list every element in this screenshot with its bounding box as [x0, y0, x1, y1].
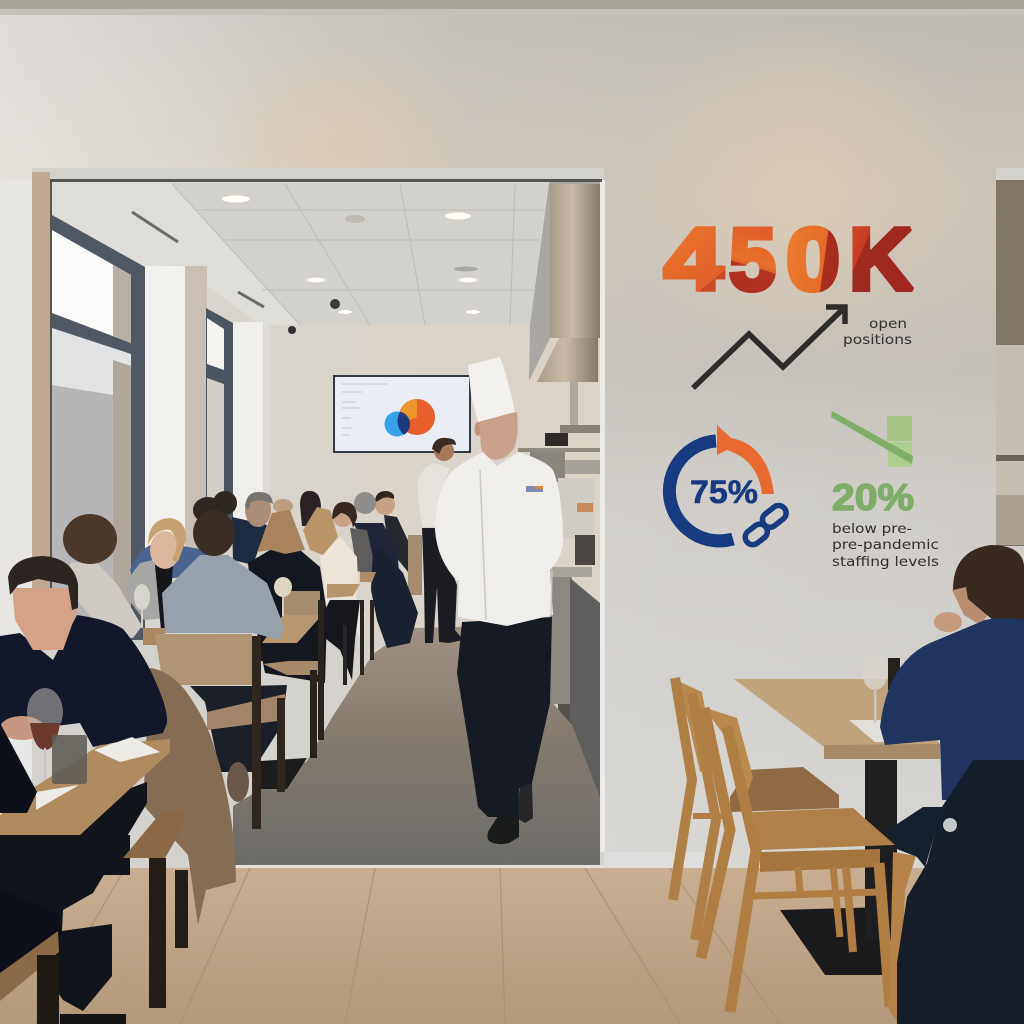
small glass on table	[134, 584, 150, 628]
grey hair guest	[353, 492, 400, 588]
digit 5: 5	[729, 210, 776, 308]
pepper mill	[888, 658, 900, 690]
20% staffing stat	[831, 411, 939, 570]
foreground diner lower	[0, 890, 62, 975]
wine glass	[27, 688, 63, 780]
chef hat	[468, 357, 515, 422]
ceiling vents and cameras	[132, 212, 478, 334]
stool seat	[123, 810, 183, 858]
staffing caption: below pre-	[832, 521, 912, 537]
open positions label: open	[869, 316, 907, 332]
left wood reveal	[32, 172, 50, 602]
wooden chair front	[701, 707, 895, 1012]
chair back front	[155, 634, 285, 829]
front chair back rest	[703, 707, 753, 800]
pillar	[145, 266, 207, 566]
table base	[780, 907, 885, 975]
digit 0: 0	[786, 210, 840, 308]
top frame shadow line	[50, 179, 602, 182]
wooden chair rear	[673, 678, 839, 940]
ceiling strip	[0, 0, 1024, 15]
brown coat on chair	[143, 668, 236, 925]
right side table	[734, 654, 940, 975]
blonde back guest	[273, 499, 293, 513]
dark under table	[0, 835, 130, 875]
hands	[0, 716, 44, 740]
grey shirt man	[162, 510, 284, 640]
chef ear	[474, 422, 482, 436]
table third	[327, 584, 360, 598]
kitchen shelves	[518, 425, 600, 565]
black trousers	[0, 782, 147, 1011]
front chair seat	[753, 808, 895, 850]
jacket logo	[943, 818, 957, 832]
75% retention ring	[669, 425, 789, 548]
trend arrow	[693, 307, 845, 388]
jacket detail	[457, 470, 552, 620]
wine glass	[274, 577, 292, 616]
ceiling grid	[172, 184, 545, 325]
rear chair seat	[730, 767, 839, 812]
open positions label: positions	[843, 332, 912, 348]
staffing caption: pre-pandemic	[832, 537, 939, 553]
door jamb right	[600, 180, 605, 852]
table far	[360, 572, 376, 582]
heads behind	[193, 491, 237, 523]
ceiling lights	[222, 196, 480, 314]
chain link icon	[742, 502, 789, 548]
table second	[143, 615, 322, 645]
letter K: K	[849, 210, 913, 308]
left wall lower light	[0, 180, 32, 650]
wine glass	[862, 654, 888, 722]
rear chair frame	[673, 678, 730, 940]
chair near woman	[261, 591, 324, 758]
wood floor	[0, 868, 1024, 1024]
baseboard	[604, 852, 704, 868]
ring blue arc	[669, 441, 733, 541]
second window	[206, 308, 233, 530]
hair	[8, 556, 78, 610]
chef face	[479, 412, 518, 460]
chair apron	[760, 849, 880, 872]
shoe	[227, 762, 249, 802]
hands	[934, 612, 962, 632]
black coat on chair	[371, 548, 418, 648]
table top	[0, 739, 170, 835]
table column	[865, 760, 897, 940]
trousers under chair	[190, 685, 287, 772]
hair and head	[953, 545, 1024, 621]
tv chart	[384, 399, 435, 436]
digit 4: 4	[664, 210, 723, 308]
tv screen	[333, 375, 471, 453]
falling bar icon	[831, 411, 913, 467]
staffing caption: staffing levels	[832, 554, 939, 570]
open positions label	[843, 316, 912, 348]
face	[12, 588, 78, 650]
table base	[260, 758, 307, 789]
ceiling tiled area	[172, 183, 548, 325]
waiter in background	[417, 438, 463, 643]
chef jacket	[435, 452, 563, 626]
seated man in navy	[880, 545, 1024, 1024]
interior back wall	[50, 180, 600, 640]
staffing caption	[832, 521, 939, 570]
table top	[734, 679, 940, 747]
rear chair back rest	[676, 680, 716, 772]
navy sweater	[880, 618, 1024, 800]
placemat	[849, 720, 885, 742]
kitchen counter	[550, 567, 600, 800]
right edge kitchen glimpse	[996, 168, 1024, 546]
far chair legs	[345, 600, 372, 685]
stool legs	[149, 858, 188, 1008]
woman navy top	[248, 510, 327, 683]
75% text: 75%	[690, 474, 758, 510]
foreground sleeve	[0, 723, 37, 813]
20% text: 20%	[832, 477, 914, 518]
left window	[52, 215, 145, 640]
infographic headline number	[664, 210, 913, 308]
interior floor	[233, 625, 600, 866]
dining room guests	[63, 491, 422, 829]
second pillar	[233, 322, 263, 542]
blonde woman	[125, 518, 186, 630]
chef	[435, 357, 563, 844]
jacket logo	[526, 486, 543, 492]
back guest woman dark	[300, 491, 321, 526]
threshold strip	[232, 865, 604, 868]
neck and face	[952, 585, 988, 625]
small wooden chair	[889, 852, 916, 1024]
cardigan woman	[332, 502, 375, 575]
water glass	[52, 735, 87, 784]
foreground chair	[0, 931, 59, 1001]
interior ceiling	[50, 180, 549, 325]
jacket on chair	[897, 760, 1024, 1024]
sweater	[0, 615, 167, 747]
tv small text lines	[342, 384, 387, 435]
foreground chair leg	[37, 955, 59, 1024]
navy man behind	[232, 492, 273, 565]
blue shirts behind	[130, 542, 217, 585]
wood bench far	[408, 535, 422, 595]
opening to dining room	[32, 168, 605, 868]
glasses guest	[375, 491, 411, 572]
ring orange arrow arc	[717, 425, 774, 494]
trousers	[888, 807, 943, 867]
cream woman	[303, 507, 365, 680]
kitchen hood	[529, 182, 600, 430]
front chair frame	[701, 708, 890, 1012]
curly hair guest	[63, 514, 142, 638]
napkin	[94, 737, 160, 762]
chef shoes	[487, 783, 533, 844]
placemat	[36, 785, 79, 810]
opening frame	[32, 168, 604, 868]
left foreground diner	[0, 556, 236, 1024]
table edge	[824, 744, 940, 759]
chef trousers	[457, 617, 552, 817]
foot base	[60, 1014, 126, 1024]
